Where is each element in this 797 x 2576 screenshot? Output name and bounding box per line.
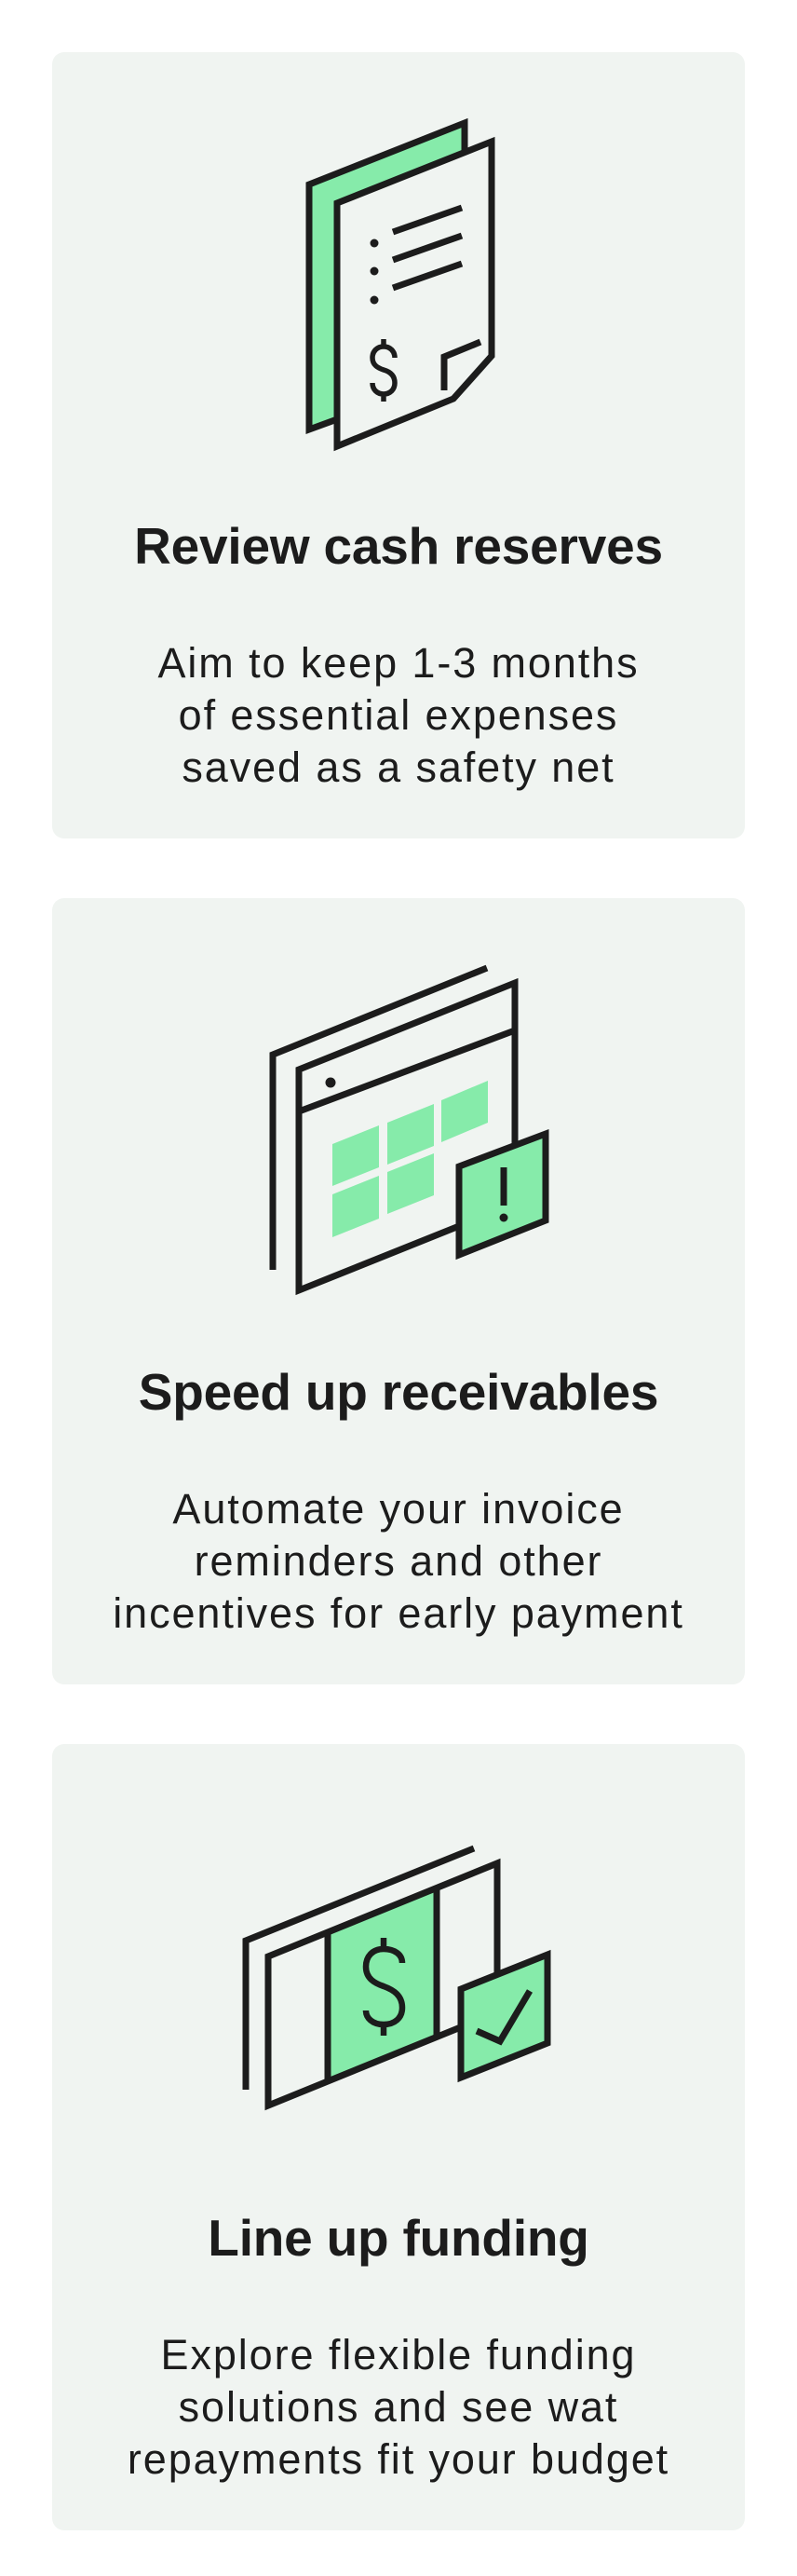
heading: Line up funding [208, 2209, 589, 2267]
panel: review cash reserves [52, 52, 745, 838]
heading: Speed up receivables [139, 1363, 658, 1421]
text block [157, 639, 640, 791]
icon: banknote with checkmark [242, 1845, 551, 2111]
text block: reminders and other [195, 1537, 602, 1585]
heading: Review cash reserves [134, 517, 663, 575]
icon: invoice documents [305, 117, 495, 451]
panel: speed up receivables [52, 898, 745, 1684]
text block: incentives for early payment [113, 1589, 684, 1637]
icon: browser window with alert [270, 965, 549, 1295]
text block: repayments fit your budget [128, 2435, 669, 2483]
text block: saved as a safety net [182, 743, 615, 791]
text block [128, 2331, 669, 2483]
panel: line up funding [52, 1744, 745, 2530]
text block [113, 1485, 684, 1637]
text block: Automate your invoice [172, 1485, 625, 1533]
text block: Explore flexible funding [161, 2331, 636, 2378]
text block: solutions and see wat [179, 2383, 618, 2431]
text block: Aim to keep 1-3 months [157, 639, 640, 687]
text block: of essential expenses [179, 691, 618, 739]
